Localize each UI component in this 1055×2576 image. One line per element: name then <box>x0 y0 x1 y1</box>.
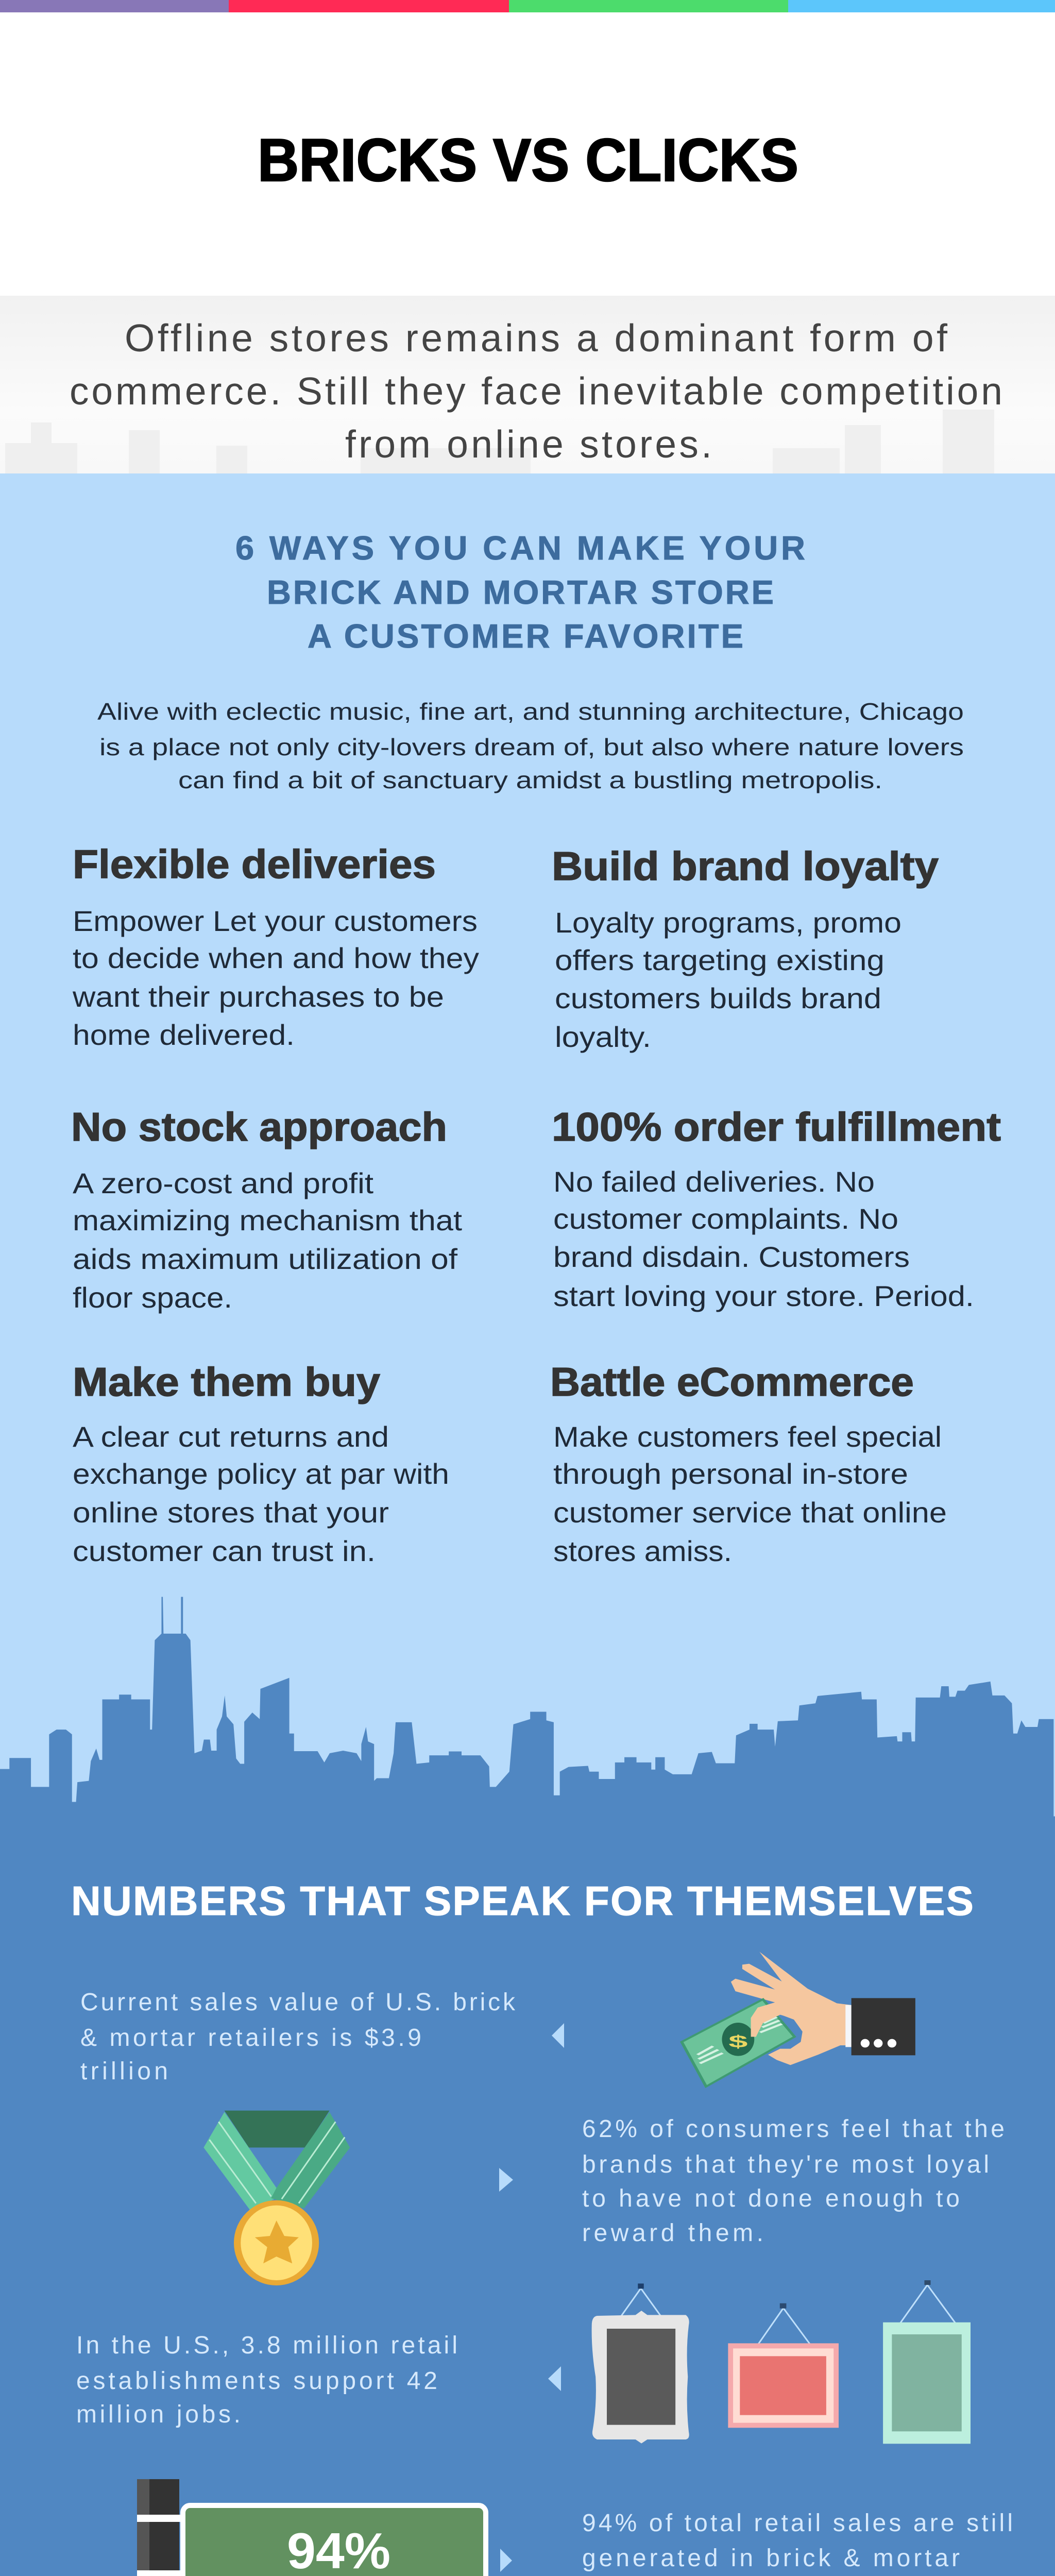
body text: exchange policy at par with <box>73 1458 449 1490</box>
colour bar <box>0 0 1055 12</box>
section heading: 6 ways: 6 WAYS YOU CAN MAKE YOUR <box>235 529 805 567</box>
heading: Build brand loyalty <box>552 843 939 889</box>
stat: 3.8 million <box>76 2332 457 2428</box>
body text: A clear cut returns and <box>73 1420 389 1453</box>
body text: No failed deliveries. No <box>553 1165 875 1198</box>
body text: to decide when and how they <box>73 942 479 974</box>
body text <box>553 1165 974 1312</box>
icon: medal <box>203 2111 350 2285</box>
heading: 100% order fulfillment <box>552 1104 1001 1149</box>
body text: maximizing mechanism that <box>73 1204 462 1236</box>
intro text: from online stores. <box>345 422 712 466</box>
stat: current sales value: Current sales value of U.S. brick <box>80 1989 516 2016</box>
body text: stores amiss. <box>553 1535 732 1567</box>
arrow: right 2 <box>500 2549 512 2572</box>
section heading: 6 ways: BRICK AND MORTAR STORE <box>267 573 774 611</box>
icon: hanging frames <box>592 2280 971 2444</box>
section heading: 6 ways: A CUSTOMER FAVORITE <box>308 617 743 655</box>
arrow: left 1 <box>552 2023 564 2048</box>
body text: Make customers feel special <box>553 1420 942 1453</box>
text block: Chicago intro: is a place not only city-lovers dream of, but also where nature lovers <box>99 734 964 760</box>
title: BRICKS VS CLICKS <box>258 126 798 194</box>
body text: start loving your store. Period. <box>553 1280 974 1312</box>
body text <box>555 906 901 1053</box>
heading: No stock approach <box>71 1104 447 1149</box>
icon: hand holding money: $ <box>728 2032 747 2052</box>
stat: 94% of retail: generated in brick & mortar <box>582 2545 960 2572</box>
text block: Chicago intro: can find a bit of sanctuary amidst a bustling metropolis. <box>178 767 882 793</box>
body text: offers targeting existing <box>555 944 884 976</box>
body text: customer can trust in. <box>73 1535 376 1567</box>
body text: online stores that your <box>73 1496 389 1529</box>
body text: through personal in-store <box>553 1458 908 1490</box>
illustration: city skyline <box>0 1597 1055 1861</box>
intro text: Offline stores remains a dominant form of <box>125 316 947 360</box>
body text: home delivered. <box>73 1019 295 1051</box>
heading: Flexible deliveries <box>73 841 436 887</box>
body text: want their purchases to be <box>72 980 444 1013</box>
body text <box>73 1167 462 1314</box>
panel: intro with faint city <box>0 296 1055 473</box>
body text: Empower Let your customers <box>73 905 478 937</box>
stat: 62% of consumers: reward them. <box>582 2219 763 2247</box>
background: dark blue section <box>0 1855 1055 2576</box>
panel: 100% order fulfillment <box>552 1104 1001 1312</box>
panel: build brand loyalty <box>552 843 939 1053</box>
text block: Chicago intro: Alive with eclectic music, fine art, and stunning architecture, Chicago <box>97 698 964 725</box>
arrow: right 1 <box>499 2168 513 2192</box>
background: white header <box>0 0 1055 296</box>
body text: brand disdain. Customers <box>553 1241 910 1273</box>
stat: current sales value <box>80 1989 516 2085</box>
arrow: left 2 <box>548 2366 561 2391</box>
stat: 94% of retail: 94% of total retail sales are still <box>582 2510 1013 2537</box>
body text: customer complaints. No <box>553 1202 898 1235</box>
stat: 62% of consumers <box>582 2115 1005 2247</box>
body text: loyalty. <box>555 1021 651 1053</box>
panel: battle ecommerce <box>550 1359 947 1567</box>
intro text: commerce. Still they face inevitable competition <box>70 369 1002 413</box>
panel: no stock approach <box>71 1104 462 1314</box>
icon: hand holding money <box>682 1952 915 2087</box>
body text: Loyalty programs, promo <box>555 906 901 939</box>
stat: 94% of retail <box>582 2510 1013 2576</box>
panel: make them buy <box>73 1359 449 1567</box>
text block: Chicago intro <box>97 698 964 793</box>
body text: A zero-cost and profit <box>73 1167 373 1199</box>
heading: Make them buy <box>73 1359 380 1404</box>
stat: 3.8 million: million jobs. <box>76 2401 241 2428</box>
body text: aids maximum utilization of <box>73 1243 457 1275</box>
panel: flexible deliveries <box>72 841 479 1051</box>
stat: current sales value: & mortar retailers is $3.9 <box>80 2024 421 2052</box>
heading: Battle eCommerce <box>550 1359 914 1404</box>
stat: current sales value: trillion <box>80 2058 168 2085</box>
section heading: numbers: NUMBERS THAT SPEAK FOR THEMSELVES <box>71 1878 974 1924</box>
stat: 3.8 million: In the U.S., 3.8 million retail <box>76 2332 457 2359</box>
icon: street sign <box>137 2479 486 2576</box>
body text: floor space. <box>73 1281 232 1314</box>
body text <box>553 1420 947 1567</box>
body text: customers builds brand <box>555 982 881 1014</box>
body text <box>72 905 479 1051</box>
body text <box>73 1420 449 1567</box>
stat: 62% of consumers: 62% of consumers feel that the <box>582 2115 1005 2143</box>
stat: 3.8 million: establishments support 42 <box>76 2367 437 2395</box>
section heading: 6 ways <box>235 529 805 655</box>
background: light blue section <box>0 473 1055 1865</box>
stat: 62% of consumers: to have not done enough to <box>582 2185 960 2212</box>
intro text <box>70 316 1002 466</box>
stat: 62% of consumers: brands that they're most loyal <box>582 2151 989 2178</box>
body text: customer service that online <box>553 1496 947 1529</box>
